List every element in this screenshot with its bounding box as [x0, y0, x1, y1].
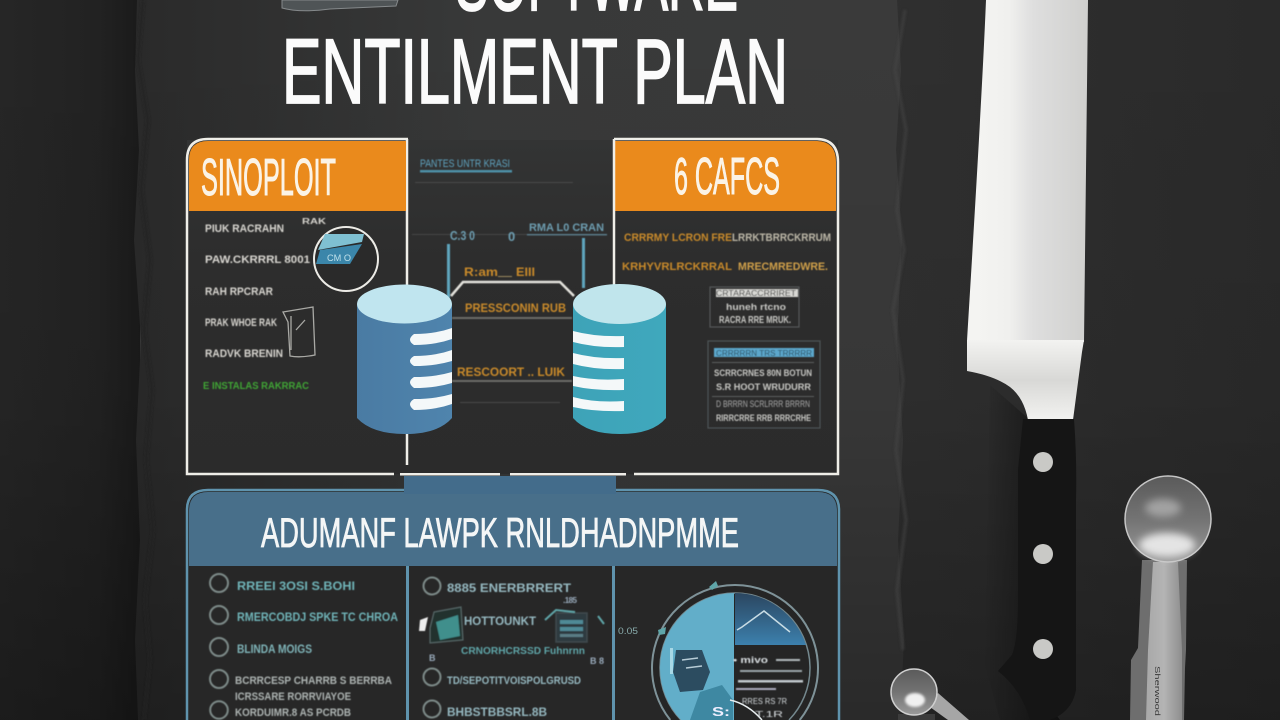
knife shadow: [985, 385, 1060, 720]
list: lower middle column: .185: [563, 596, 578, 605]
banner heading: ADUMANF LAWPK RNLDHADNPMME: [261, 509, 739, 556]
circular dashboard: [652, 581, 818, 720]
panel: six cases: 6 CAFCS: [674, 148, 780, 206]
list: lower middle column: CRNORHCRSSD Fuhnrnn: [461, 646, 585, 657]
synopsis list: RAK: [302, 217, 326, 226]
panel: center connectors: R:am: [464, 265, 498, 279]
icon: blueprint: [419, 607, 463, 643]
list: lower left column: RREEI 3OSI S.BOHI: [237, 579, 355, 593]
detail box: RIRRCRRE RRB RRRCRHE: [716, 413, 811, 424]
icon: document: [283, 307, 315, 357]
list: lower left column: [210, 574, 398, 719]
list: lower middle column: B: [429, 653, 436, 663]
blade: [967, 0, 1088, 342]
panel: center connectors: EIII: [516, 265, 535, 279]
detail box: CRRRRRN TRS TRRRRR: [716, 349, 812, 358]
panel: center connectors: 0: [508, 229, 515, 244]
bolster: [967, 340, 1084, 420]
large measuring spoon: [1125, 476, 1211, 720]
list: lower left column: RMERCOBDJ SPKE TC CHROA: [237, 610, 398, 624]
pointer: [730, 700, 762, 720]
detail box: SCRRCRNES 80N BOTUN: [714, 368, 812, 379]
panel: center connectors: RESCOORT .. LUIK: [457, 365, 565, 379]
logo fragment: [282, 0, 398, 11]
spoon engraving: Sherwood: [1153, 666, 1160, 716]
title: ENTILMENT PLAN: [282, 21, 788, 123]
panel: lower banner: [187, 476, 839, 720]
synopsis list: E INSTALAS RAKRRAC: [203, 381, 309, 392]
panel: center connectors: [412, 158, 607, 403]
side note: 0.05: [618, 626, 638, 636]
upper panel backdrop: [187, 140, 838, 474]
synopsis list: PIUK RACRAHN: [205, 223, 284, 235]
panel: center connectors: PANTES UNTR KRASI: [420, 158, 510, 170]
detail box: S.R HOOT WRUDURR: [716, 382, 811, 393]
synopsis list: RADVK BRENIN: [205, 348, 283, 360]
right database cylinder: [573, 284, 666, 434]
orange text lines: CRRRMY LCRON FRE: [624, 232, 732, 244]
connector tab: [404, 476, 616, 494]
list: lower middle column: BHBSTBBSRL.8B: [447, 705, 547, 719]
slate board: [134, 0, 904, 720]
orange text lines: [622, 232, 831, 273]
list: lower left column: KORDUIMR.8 AS PCRDB: [235, 707, 351, 719]
icon: magnifier circle: [314, 227, 378, 291]
panel bottom rule: [400, 473, 626, 476]
synopsis list: RAH RPCRAR: [205, 286, 273, 298]
list: lower middle column: [419, 578, 604, 719]
dashboard labels: [733, 655, 803, 719]
panel: center connectors: PRESSCONIN RUB: [465, 301, 566, 315]
note box: huneh rtcno: [726, 302, 787, 312]
list: lower middle column: TD/SEPOTITVOISPOLGRUSD: [447, 675, 581, 687]
panel: center connectors: RMA L0 CRAN: [529, 222, 604, 234]
line chart: [737, 611, 790, 632]
dashboard labels: • mivo: [733, 655, 769, 665]
dashboard labels: T.1R: [755, 710, 783, 719]
note box: RACRA RRE MRUK.: [719, 315, 791, 326]
knife: [967, 0, 1088, 720]
ring markers: [658, 581, 718, 635]
list: lower left column: BCRRCESP CHARRB S BERRBA: [235, 675, 392, 687]
panel: synopsis: [187, 139, 408, 474]
handle: [998, 419, 1076, 720]
left database cylinder: [357, 284, 452, 434]
list: lower left column: BLINDA MOIGS: [237, 642, 312, 656]
panel: six cases: [614, 139, 838, 474]
orange text lines: KRHYVRLRCKRRAL: [622, 261, 732, 273]
note box: CRTARACCRRIRET: [716, 289, 796, 298]
note box: [710, 287, 799, 327]
panel: synopsis: SINOPLOIT: [201, 149, 336, 207]
detail box: D BRRRN SCRLRRR BRRRN: [716, 399, 810, 409]
list: lower middle column: B8: [590, 656, 604, 666]
panel: center connectors: C.3 0: [450, 228, 475, 243]
title: [282, 0, 788, 123]
synopsis list: [203, 217, 326, 392]
synopsis list: PAW.CKRRRL 8001: [205, 254, 310, 266]
list: lower middle column: HOTTOUNKT: [464, 614, 537, 628]
list: lower middle column: 8885 ENERBRRERT: [447, 581, 572, 595]
icon: screen: [545, 610, 604, 642]
list: lower left column: ICRSSARE RORRVIAYOE: [235, 691, 351, 703]
detail box: [708, 341, 820, 428]
synopsis list: PRAK WHOE RAK: [205, 317, 277, 329]
circular dashboard: S:: [712, 704, 730, 719]
portrait: [670, 648, 733, 720]
dashboard labels: RRES RS 7R: [742, 697, 787, 706]
orange text lines: LRRKTBRRCKRRUM: [732, 232, 831, 244]
small measuring spoon: [891, 669, 969, 720]
icon: magnifier circle: CM O: [327, 253, 351, 263]
orange text lines: MRECMREDWRE.: [738, 261, 828, 273]
